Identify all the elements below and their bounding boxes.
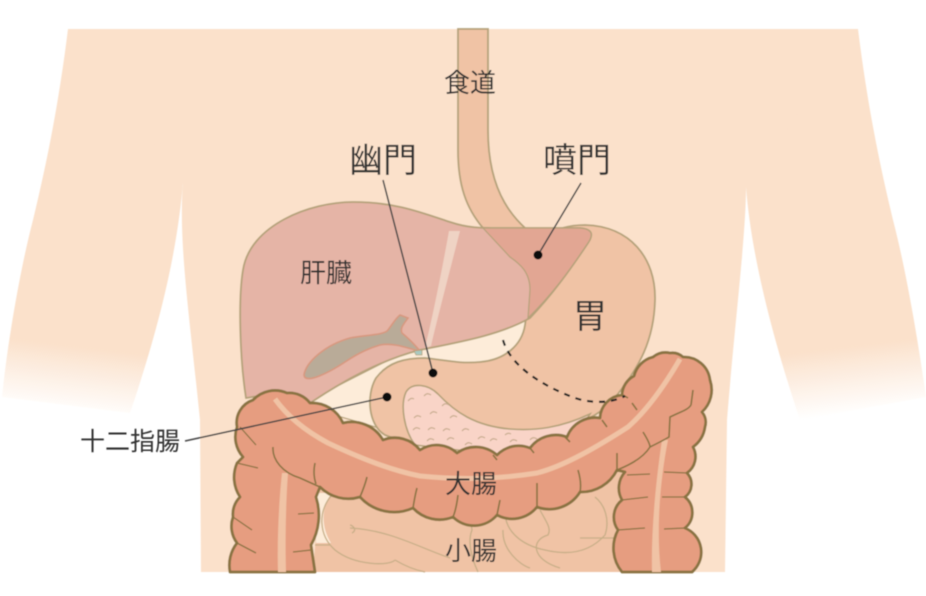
colon tenia band [275, 359, 680, 478]
label: esophagus: 食道 [444, 68, 496, 98]
esophagus [458, 29, 560, 300]
haustra fold lines [273, 390, 693, 517]
label: pylorus: 幽門 [349, 142, 417, 180]
falciform ligament [425, 231, 460, 348]
label: duodenum: 十二指腸 [80, 428, 180, 456]
large intestine [229, 353, 712, 572]
label: large intestine: 大腸 [445, 469, 497, 499]
stomach greater curvature dashes [503, 340, 625, 402]
label: small intestine: 小腸 [445, 536, 497, 566]
liver [240, 202, 591, 410]
pancreas [403, 385, 590, 462]
leader: cardia [534, 183, 581, 260]
label: stomach: 胃 [573, 298, 607, 336]
gallbladder [304, 315, 420, 379]
label: liver: 肝臓 [300, 258, 352, 288]
haustra folds on ascending and descending colon [233, 427, 687, 553]
liver over stomach overlap [483, 228, 591, 318]
label: cardia: 噴門 [543, 142, 611, 180]
stomach and duodenum [300, 225, 655, 443]
leader: duodenum [185, 392, 392, 441]
leader: pylorus [383, 180, 438, 378]
small intestine [313, 470, 625, 572]
bile duct [414, 350, 422, 355]
